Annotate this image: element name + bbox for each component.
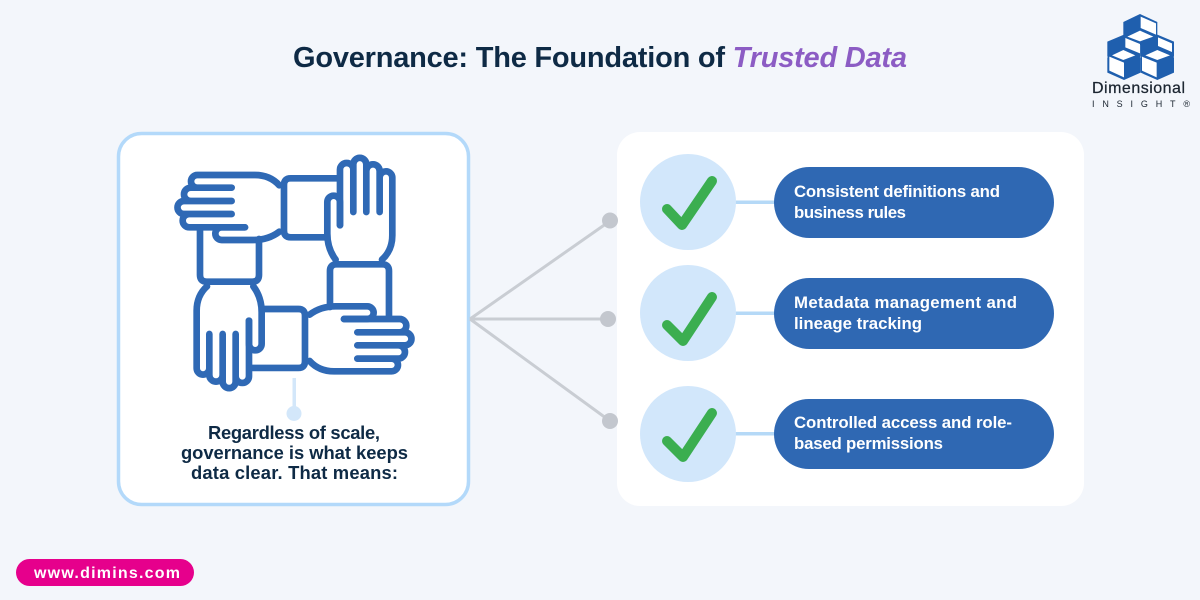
panel text: Regardless of scale, xyxy=(208,422,380,443)
icon: stacked cubes xyxy=(1107,14,1174,80)
pill 1: Consistent definitions and xyxy=(794,182,1000,201)
pill 1: business rules xyxy=(794,203,906,222)
icon: check 2 xyxy=(640,265,736,361)
stem with dot xyxy=(286,378,302,421)
pill 2: Metadata management and xyxy=(794,293,1017,312)
pill 3 xyxy=(774,399,1054,469)
item 3 xyxy=(640,386,1054,482)
website badge: www.dimins.com xyxy=(33,565,180,582)
icon: four interlocking hands xyxy=(177,158,411,388)
pill 3: Controlled access and role- xyxy=(794,413,1012,432)
logo wordmark: Dimensional xyxy=(1092,80,1185,97)
pill 3: based permissions xyxy=(794,434,943,453)
logo subword: INSIGHT® xyxy=(1092,99,1190,109)
panel: governance xyxy=(118,134,468,504)
panel text: governance is what keeps xyxy=(181,442,408,463)
title: Governance: The Foundation of Trusted Data xyxy=(293,42,907,74)
website badge xyxy=(16,559,194,586)
connector dots xyxy=(600,212,618,429)
item 1 xyxy=(640,154,1054,250)
logo: Dimensional Insight xyxy=(1092,14,1190,109)
icon: check 1 xyxy=(640,154,736,250)
pill 1 xyxy=(774,167,1054,238)
icon: check 3 xyxy=(640,386,736,482)
pill 2: lineage tracking xyxy=(794,314,922,333)
panel text: data clear. That means: xyxy=(191,462,398,483)
panel: checklist xyxy=(617,132,1084,506)
pill 2 xyxy=(774,278,1054,349)
item 2 xyxy=(640,265,1054,361)
panel text xyxy=(181,422,408,483)
connector lines xyxy=(470,221,610,421)
